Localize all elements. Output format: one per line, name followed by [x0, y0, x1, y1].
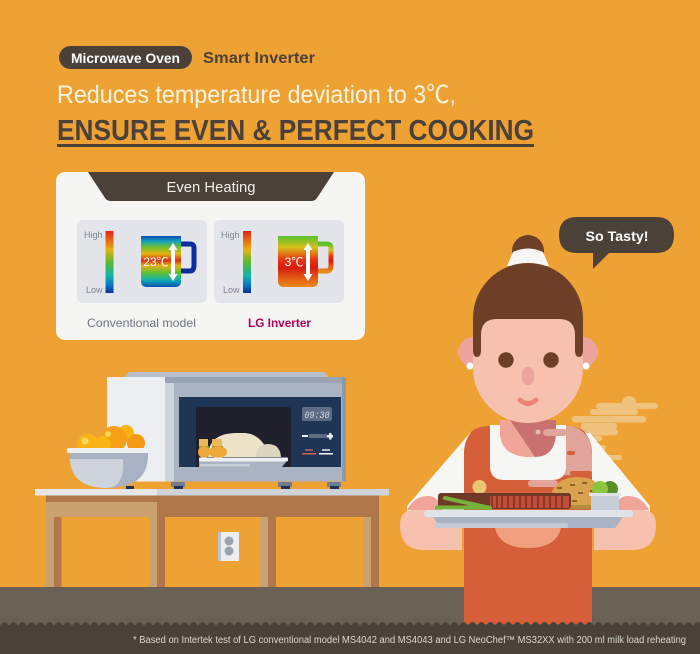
door panel [179, 397, 341, 467]
bib [490, 425, 566, 480]
steak [438, 493, 571, 509]
sub-panel: LG Inverter: Low [223, 285, 240, 295]
food in oven [198, 433, 281, 458]
controls [302, 433, 333, 454]
icon: mug 23 degrees: 23℃ [143, 255, 169, 269]
sub-panel: conventional model [77, 220, 207, 303]
woman with tray [400, 235, 658, 624]
hair bun [512, 235, 544, 267]
clock display [302, 407, 332, 422]
wall socket [218, 532, 239, 561]
headline: Reduces temperature deviation to 3℃, [57, 81, 456, 109]
sub-panel: conventional model: High [84, 230, 103, 240]
sub-panel: conventional model: Low [86, 285, 103, 295]
speech bubble [559, 217, 674, 269]
speech bubble: So Tasty! [586, 228, 648, 244]
microwave oven [107, 372, 346, 489]
nose [522, 367, 534, 385]
panel: even heating [56, 172, 365, 340]
icon: mug 3 degrees: 3℃ [285, 255, 303, 269]
rice [552, 477, 601, 509]
door window [196, 407, 291, 467]
hair [473, 263, 583, 357]
mouth [520, 400, 536, 404]
header tag: Microwave Oven [59, 46, 192, 69]
banner: Even Heating: Even Heating [166, 180, 256, 196]
sub-panel: LG Inverter: High [221, 230, 240, 240]
floor [0, 587, 700, 627]
sleeves [407, 433, 650, 516]
hands and arms [400, 510, 462, 550]
apron [464, 426, 592, 624]
food steam over apron [530, 426, 592, 478]
floor front band [0, 621, 700, 654]
sauce cup [602, 481, 618, 497]
clock display: 09:30 [304, 411, 330, 422]
face [473, 319, 583, 423]
steam [572, 396, 658, 460]
main title with underline: ENSURE EVEN & PERFECT COOKING [57, 115, 534, 147]
table [35, 489, 389, 587]
header tag: Microwave Oven: Microwave Oven [71, 50, 180, 66]
feet [171, 482, 341, 489]
neck [500, 420, 556, 457]
green beans [445, 498, 490, 508]
tray [433, 517, 623, 528]
belly [495, 528, 561, 548]
label: Conventional model: Conventional model [87, 316, 196, 330]
apron badge [472, 480, 486, 494]
subheading: Smart Inverter: Smart Inverter [203, 50, 315, 67]
label: LG Inverter: LG Inverter [248, 316, 311, 330]
banner: Even Heating [88, 172, 334, 201]
eyes [498, 352, 514, 368]
plate [199, 458, 288, 481]
ears [458, 337, 488, 367]
sub-panel: LG Inverter [214, 220, 344, 303]
bowl of oranges [67, 425, 148, 489]
